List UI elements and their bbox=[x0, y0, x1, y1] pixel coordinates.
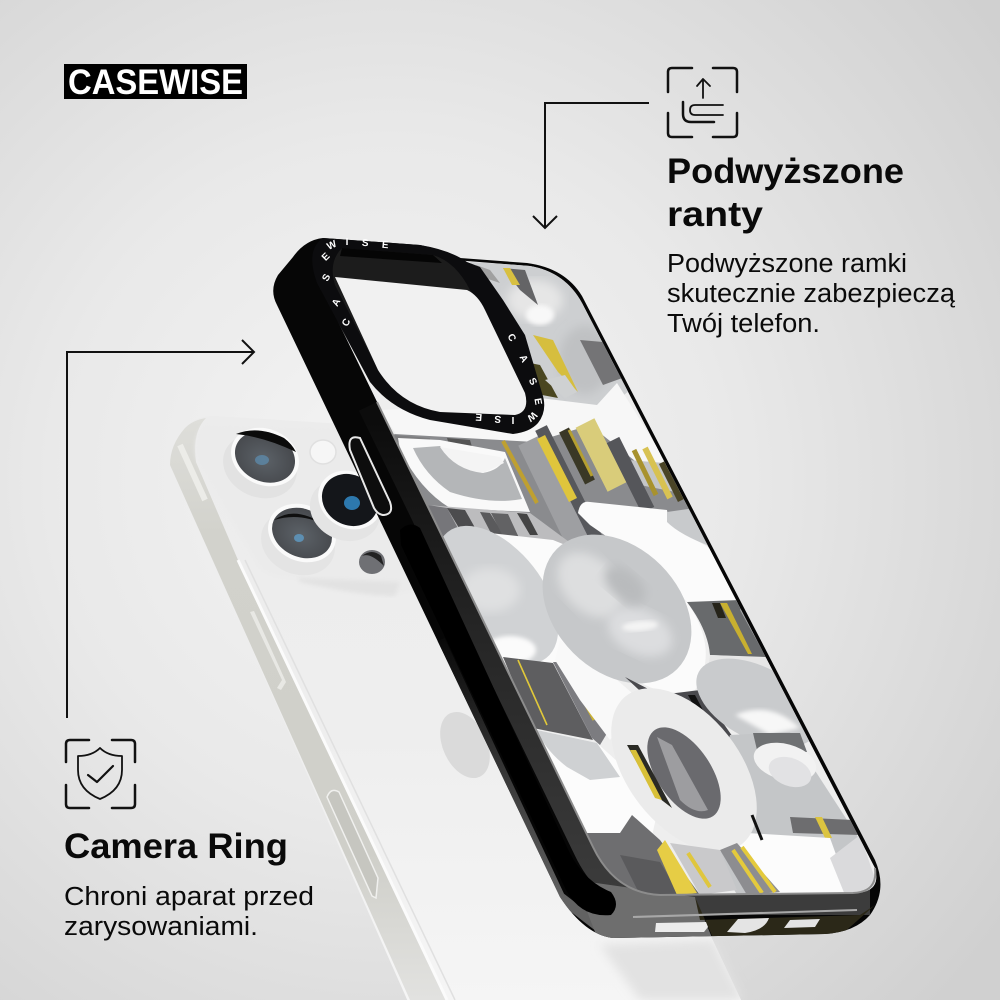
left grey ellipse bbox=[444, 526, 558, 662]
arrow: top bbox=[533, 103, 649, 228]
screen edge highlight bbox=[377, 402, 875, 895]
text: raised edges: Twój telefon. bbox=[667, 310, 820, 338]
lower left white shape bbox=[538, 730, 655, 833]
right grey ellipse bbox=[696, 658, 809, 744]
apple logo shadow bbox=[430, 704, 500, 786]
logo: CASEWISE bbox=[68, 63, 243, 102]
dark patch lower left bbox=[503, 657, 593, 740]
text: camera ring bbox=[64, 883, 314, 941]
ring lettering: E bbox=[531, 397, 544, 406]
microphone port bbox=[784, 919, 820, 928]
lens 3 bbox=[300, 459, 393, 552]
grey strip bottom right bbox=[790, 817, 860, 835]
bottom highlight bbox=[633, 910, 857, 917]
lower right field bbox=[720, 732, 875, 894]
bottom white bbox=[740, 833, 844, 893]
ring lettering: E bbox=[320, 251, 333, 263]
ring lettering: E bbox=[381, 240, 389, 251]
upper clouds bbox=[470, 262, 630, 415]
left white shape bbox=[494, 534, 564, 672]
upper white shape bbox=[578, 502, 740, 603]
camera hole bbox=[333, 248, 526, 415]
ring lettering: S bbox=[320, 272, 333, 283]
white ring arc around big circle bbox=[643, 602, 706, 692]
case shadow on phone bbox=[600, 940, 743, 1000]
ring lettering: C bbox=[505, 332, 518, 344]
speaker port bbox=[727, 918, 769, 933]
striped field bbox=[394, 429, 692, 537]
heading: raised edges: Podwyższone bbox=[667, 152, 904, 191]
dark patch right bbox=[687, 600, 767, 657]
ring lettering: S bbox=[494, 413, 502, 424]
ring lettering: C bbox=[340, 317, 353, 329]
case translucent corner bbox=[587, 882, 712, 938]
dark stripes below circle bbox=[625, 677, 732, 738]
heading: raised edges: ranty bbox=[667, 195, 764, 234]
ring lettering: A bbox=[517, 353, 530, 365]
text: camera ring: Chroni aparat przed bbox=[64, 883, 314, 911]
ring lettering: W bbox=[325, 239, 339, 253]
heading: raised edges bbox=[667, 152, 904, 234]
ring lettering: W bbox=[524, 409, 539, 424]
white phone behind the case bbox=[170, 416, 760, 1000]
phone back bbox=[170, 416, 760, 1000]
sensor bbox=[359, 550, 385, 574]
lens 2 bbox=[251, 493, 345, 587]
case rim left bbox=[377, 402, 870, 895]
white crescent and grey arc bbox=[398, 438, 530, 512]
lens 1 bbox=[213, 417, 308, 510]
black phone case bbox=[273, 237, 890, 945]
charging port bbox=[655, 922, 708, 932]
gold bar bbox=[657, 840, 697, 895]
ring lettering bbox=[320, 237, 544, 425]
big white ring bbox=[612, 688, 757, 852]
dark lower patch bbox=[585, 815, 700, 895]
big grey circle bbox=[542, 534, 692, 684]
side button lower bbox=[327, 790, 378, 898]
textured band bbox=[712, 655, 778, 680]
camera ring bbox=[312, 237, 544, 434]
side button upper bbox=[250, 611, 286, 690]
heading: camera ring: Camera Ring bbox=[64, 827, 288, 866]
text: camera ring: zarysowaniami. bbox=[64, 913, 258, 941]
icon: shield bbox=[66, 740, 135, 808]
ring lettering: I bbox=[346, 237, 349, 248]
ring lettering: I bbox=[511, 414, 514, 425]
icon: raised edges bbox=[668, 68, 737, 137]
ring lettering: E bbox=[475, 411, 483, 422]
big white cloud bbox=[556, 660, 631, 740]
printed pattern bbox=[330, 250, 890, 900]
side button bbox=[349, 437, 391, 515]
arrow: left bbox=[67, 340, 254, 718]
white middle band bbox=[382, 383, 666, 464]
text: raised edges: skutecznie zabezpieczą bbox=[667, 280, 956, 308]
text: raised edges: Podwyższone ramki bbox=[667, 250, 907, 278]
case side window bbox=[400, 524, 616, 915]
camera bump bbox=[195, 425, 420, 595]
case frame bbox=[273, 238, 880, 938]
stripes under crescent bbox=[428, 505, 568, 544]
flash bbox=[310, 440, 336, 464]
ring lettering: S bbox=[526, 376, 539, 388]
ring lettering: S bbox=[361, 238, 369, 249]
ring lettering: A bbox=[330, 297, 343, 309]
phone side band bbox=[170, 418, 447, 1000]
text: raised edges bbox=[667, 250, 956, 338]
